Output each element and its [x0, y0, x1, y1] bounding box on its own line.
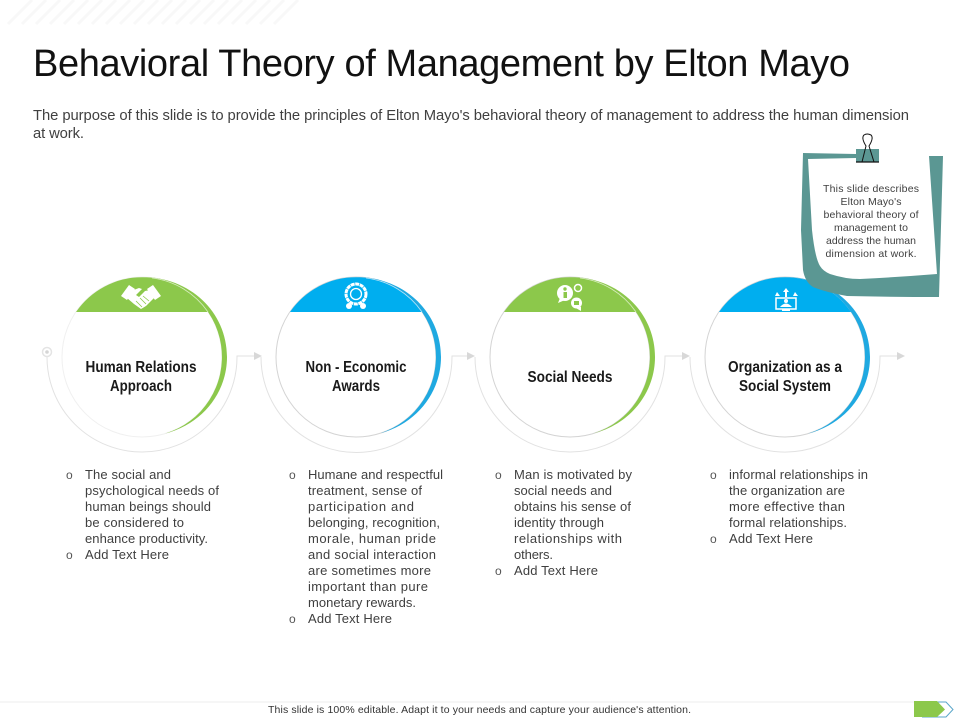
step 2 bullets: Humane and respectful	[308, 467, 443, 482]
footer note: This slide is 100% editable. Adapt it to your needs and capture your audience's attention.	[268, 704, 691, 716]
step 4 bullets: informal relationships in	[729, 467, 868, 482]
step 3 bullets: obtains his sense of	[514, 499, 631, 514]
step 1 heading: Human Relations	[86, 359, 197, 376]
step 1 bullets: o	[66, 468, 73, 482]
blue cap	[719, 277, 851, 312]
step 2: non-economic awards	[261, 277, 475, 453]
note text: Elton Mayo's	[840, 196, 902, 208]
step 3 bullets: Man is motivated by	[514, 467, 632, 482]
step 3 bullets	[495, 467, 632, 578]
note teal frame	[801, 153, 943, 297]
step 1 bullets: psychological needs of	[85, 483, 219, 498]
step 2 heading: Awards	[332, 378, 380, 395]
note text	[823, 183, 919, 260]
step 1 bullets: o	[66, 548, 73, 562]
step 1 connector arc and arrow	[42, 348, 262, 452]
step 1 bullets	[66, 467, 219, 562]
step 3 bullets: relationships with	[514, 531, 622, 546]
icon: award medal	[346, 284, 366, 309]
step 2 bullets: treatment, sense of	[308, 483, 422, 498]
note paper	[808, 156, 937, 280]
step 4 bullets: more effective than	[729, 499, 845, 514]
step 2 connector arc and arrow	[261, 352, 475, 453]
note text: behavioral theory of	[824, 209, 919, 221]
step 2 heading: Non - Economic	[306, 359, 407, 376]
step 2 bullets: belonging, recognition,	[308, 515, 440, 530]
step 3: social needs	[475, 277, 690, 452]
step 3 bullets: social needs and	[514, 483, 612, 498]
step 4 bullets: o	[710, 468, 717, 482]
step 2 bullets: participation and	[308, 499, 414, 514]
note text: management to	[834, 222, 908, 234]
description text	[33, 108, 909, 142]
note text: This slide describes	[823, 183, 919, 195]
step 4 heading	[728, 359, 842, 395]
step 1 bullets: The social and	[85, 467, 171, 482]
step 2 bullets: o	[289, 468, 296, 482]
step 2 bullets: are sometimes more	[308, 563, 431, 578]
green cap	[76, 277, 208, 312]
step 2 bullets: and social interaction	[308, 547, 436, 562]
green crescent	[142, 277, 227, 434]
step 2 bullets: monetary rewards.	[308, 595, 416, 610]
step 1 bullets: be considered to	[85, 515, 184, 530]
step 1 heading: Approach	[110, 378, 172, 395]
icon: organization network	[775, 288, 798, 311]
blue crescent	[356, 277, 441, 434]
step 1 bullets: enhance productivity.	[85, 531, 208, 546]
step 3 bullets: o	[495, 564, 502, 578]
step 2 bullets	[289, 467, 443, 626]
green cap	[504, 277, 636, 312]
step 2 bullets: morale, human pride	[308, 531, 436, 546]
step 1: human relations approach	[42, 277, 262, 452]
step 4 bullets: formal relationships.	[729, 515, 847, 530]
description text: The purpose of this slide is to provide the principles of Elton Mayo's behavioral theory of management to address the human dimension	[33, 108, 909, 124]
sticky note callout	[801, 134, 943, 297]
step 3 bullets: identity through	[514, 515, 604, 530]
icon: binder clip	[856, 134, 879, 162]
step 1 bullets: human beings should	[85, 499, 211, 514]
step 3 bullets: o	[495, 468, 502, 482]
step 3 heading: Social Needs	[528, 369, 613, 386]
icon: handshake	[121, 285, 161, 309]
note text: dimension at work.	[826, 248, 916, 260]
step 1 heading	[86, 359, 197, 395]
step 3 connector arc and arrow	[475, 352, 690, 452]
step 4 bullets	[710, 467, 868, 546]
step 4 bullets: the organization are	[729, 483, 845, 498]
step 3 bullets: others.	[514, 547, 553, 562]
blue crescent	[785, 277, 870, 434]
title: Behavioral Theory of Management by Elton Mayo	[33, 43, 850, 85]
step 3 bullets: Add Text Here	[514, 563, 598, 578]
step 2 bullets: Add Text Here	[308, 611, 392, 626]
description text: at work.	[33, 126, 84, 142]
icon: next arrow	[914, 701, 953, 717]
green crescent	[570, 277, 655, 434]
step 2 heading	[306, 359, 407, 395]
step 2 bullets: o	[289, 612, 296, 626]
icon: speech bubbles	[557, 284, 582, 311]
step 4 bullets: o	[710, 532, 717, 546]
note text: address the human	[826, 235, 916, 247]
step 1 bullets: Add Text Here	[85, 547, 169, 562]
step 4 connector arc and arrow	[690, 352, 905, 452]
step 4 bullets: Add Text Here	[729, 531, 813, 546]
step 4 heading: Social System	[739, 378, 831, 395]
step 4: organization as a social system	[690, 277, 905, 452]
step 2 bullets: important than pure	[308, 579, 428, 594]
step 4 heading: Organization as a	[728, 359, 842, 376]
blue cap	[290, 277, 422, 312]
